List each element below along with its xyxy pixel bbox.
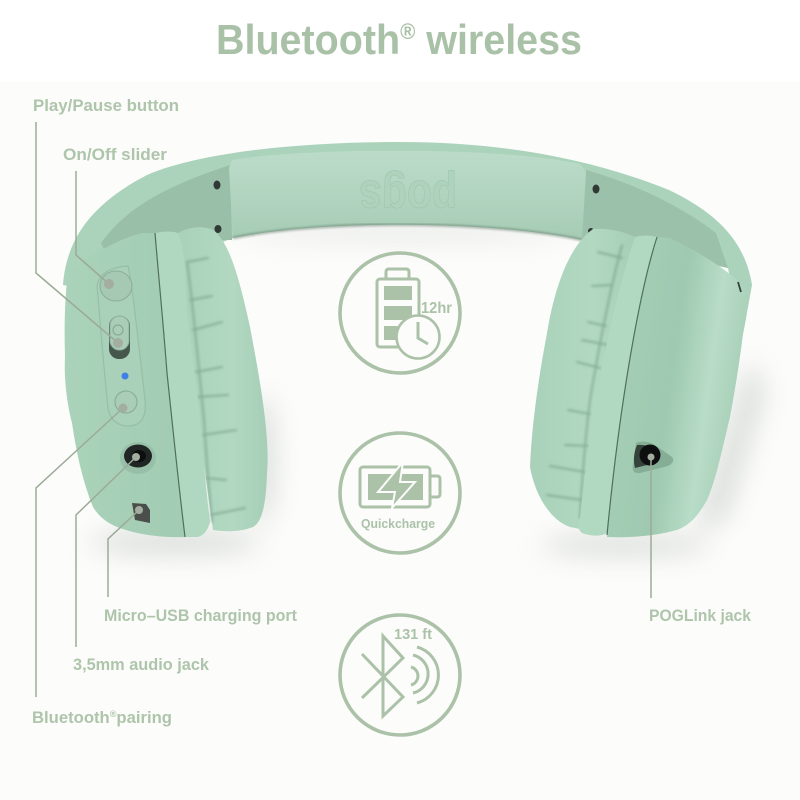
icon: quickcharge battery: [340, 433, 460, 553]
icon: bluetooth range: 131 ft: [394, 626, 432, 643]
POGLink jack: [633, 442, 673, 473]
photo: headphones: [63, 142, 765, 555]
play/pause button: [100, 271, 132, 301]
label: Play/Pause button: Play/Pause button: [33, 97, 179, 115]
3.5mm jack: [120, 442, 156, 474]
pad logo: pogs: [359, 170, 457, 226]
left cushion wrinkles: [187, 258, 245, 522]
bluetooth LED: [122, 372, 128, 380]
icon: quickcharge battery: Quickcharge: [361, 517, 435, 531]
label: Bluetooth pairing: pairing: [116, 709, 172, 727]
pairing button: [115, 391, 137, 413]
label: POGLink jack: POGLink jack: [649, 607, 752, 625]
leader: 3.5mm jack: [76, 453, 140, 647]
leader: On/Off: [76, 171, 114, 289]
leader: POGLink: [648, 454, 654, 598]
on/off slider: [109, 316, 130, 359]
headband outer arc: [63, 142, 752, 340]
label: Bluetooth pairing: ®: [110, 709, 117, 719]
left housing: [65, 233, 185, 537]
title: Bluetooth: [216, 16, 412, 63]
left ring: [155, 232, 210, 537]
shadows: [90, 227, 765, 555]
leader: Micro-USB: [108, 506, 143, 597]
right ring: [579, 236, 657, 536]
leader: Bluetooth pairing: [36, 404, 128, 697]
right housing: [607, 237, 747, 537]
icon: 12hr battery: 12hr: [421, 300, 452, 317]
icon: 12hr battery: [340, 253, 460, 373]
left cushion: [178, 227, 268, 531]
label: On/Off slider: On/Off slider: [63, 146, 168, 164]
headband pad: [229, 151, 586, 240]
right cushion: [530, 229, 635, 530]
label: 3,5mm audio jack: 3,5mm audio jack: [73, 656, 210, 674]
headband inner shaded faces: [101, 165, 232, 262]
leader: Play/Pause: [36, 122, 123, 348]
control groove: [97, 266, 145, 426]
label: Bluetooth pairing: Bluetooth: [32, 709, 109, 727]
title: ®: [400, 19, 415, 44]
headband screws: [214, 180, 600, 234]
icon: bluetooth range: [340, 615, 460, 735]
right cushion wrinkles: [547, 245, 622, 518]
title: wireless: [415, 16, 582, 63]
micro-usb port: [132, 503, 150, 523]
label: Micro-USB charging port: Micro–USB charging port: [104, 607, 297, 625]
